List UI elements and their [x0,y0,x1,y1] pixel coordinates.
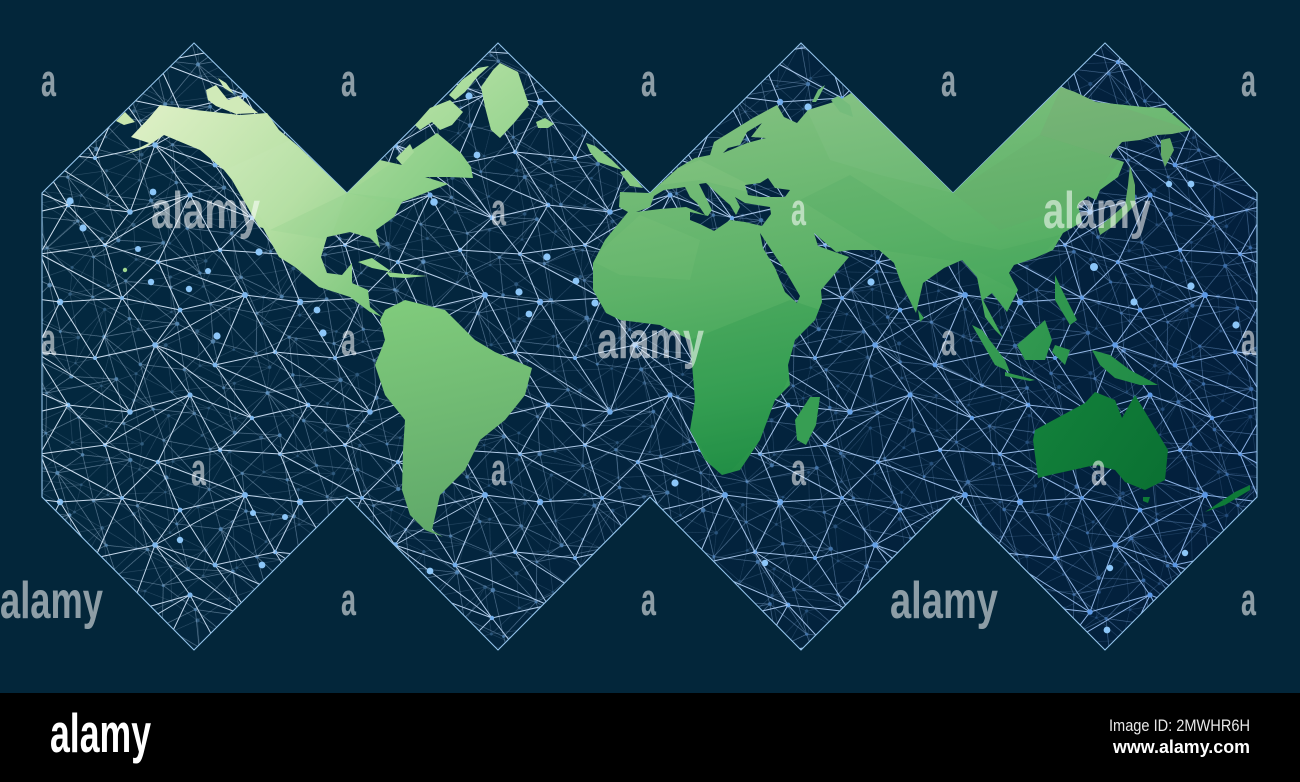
landmass: Southeast Asia islands [918,275,1158,385]
network mesh [42,43,1257,650]
panel: network map [42,43,1257,650]
landmass: Madagascar [795,397,820,445]
landmass: Greenland and Arctic Canada [396,63,554,165]
watermarks: small a marks: a [1241,55,1257,106]
landmass: North America [116,78,475,317]
watermarks: small a marks: a [1091,444,1107,495]
landmass: Eurasia and Africa [590,87,1191,480]
watermarks: small a marks: a [641,574,657,625]
image id: Image ID: 2MWHR6H [1109,716,1250,735]
watermarks: small a marks: a [1241,574,1257,625]
watermarks: alamy large: alamy [1043,182,1151,240]
watermarks: small a marks: a [41,314,57,365]
watermarks: alamy large: alamy [890,572,998,630]
watermarks: small a marks: a [341,314,357,365]
watermarks: small a marks: a [791,184,807,235]
watermarks: alamy large [0,182,1151,630]
landmass: South America [375,300,532,537]
landmass: Australia [1033,392,1168,490]
watermarks: small a marks: a [791,444,807,495]
watermarks: small a marks [41,55,1257,625]
watermarks: small a marks: a [341,574,357,625]
landmass: Japan and east Asia islands [1098,138,1174,235]
landmass: Europe islands [586,85,853,188]
footer logo: alamy [50,702,151,764]
watermarks: alamy large: alamy [151,182,260,240]
watermarks: small a marks: a [941,55,957,106]
watermarks: small a marks: a [491,444,507,495]
watermarks: small a marks: a [491,184,507,235]
watermarks: small a marks: a [41,55,57,106]
footer bar [0,693,1300,782]
watermarks: alamy large: alamy [0,572,103,630]
watermarks: small a marks: a [341,55,357,106]
website: www.alamy.com [1112,737,1250,757]
watermarks: small a marks: a [191,444,207,495]
map outline [42,43,1257,650]
watermarks: small a marks: a [1241,314,1257,365]
landmass: Caribbean islands [358,258,427,278]
watermarks: small a marks: a [941,314,957,365]
landmass: New Zealand and Tasmania [1143,485,1250,512]
hub nodes [66,92,1240,633]
watermarks: small a marks: a [641,55,657,106]
watermarks: alamy large: alamy [597,312,704,370]
